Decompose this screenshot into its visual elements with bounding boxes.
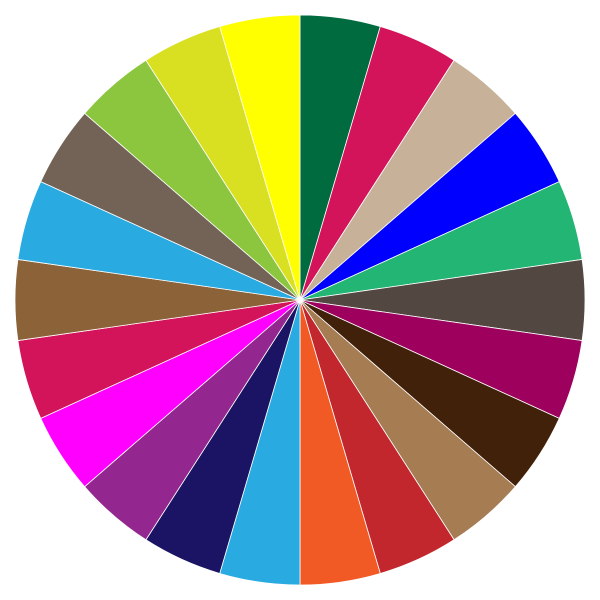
segment: very dark brown [300,300,559,487]
segment: magenta [41,300,300,487]
segment: yellow-green [146,27,300,300]
segment: taupe [41,113,300,300]
segment: red [300,300,454,573]
segment: blue [300,113,559,300]
segment: crimson [18,300,300,418]
segment: tan [300,60,515,300]
segment: light brown [300,300,515,540]
segment: lime green [85,60,300,300]
segment: green [300,182,582,300]
segment: crimson [300,27,454,300]
segment: maroon [300,300,582,418]
segment: orange [300,300,380,585]
segment: brown [15,259,300,341]
segment: purple [85,300,300,540]
segment: dark brown [300,259,585,341]
segment: dark green [300,15,380,300]
segment: sky blue [220,300,300,585]
segment: navy [146,300,300,573]
segment: yellow [220,15,300,300]
segment: sky blue [18,182,300,300]
